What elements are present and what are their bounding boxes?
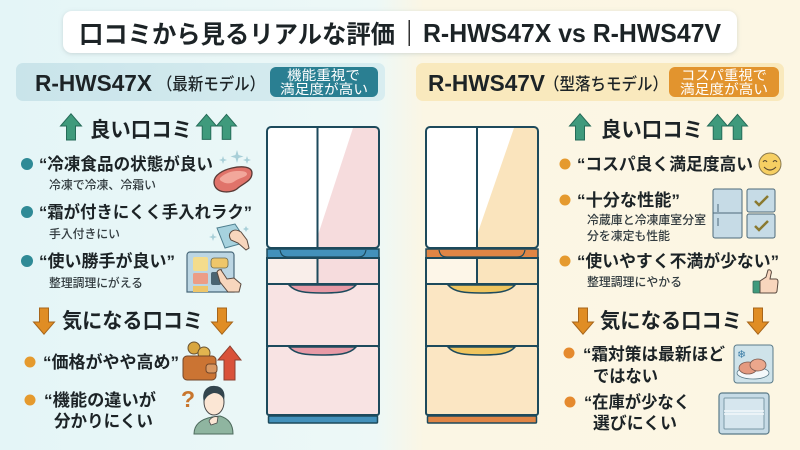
blue base (268, 416, 378, 423)
heading: R-HWS47X (16, 63, 385, 101)
heading: good reviews (570, 114, 748, 142)
top doors (426, 127, 538, 248)
heading: good reviews: 良い口コミ (601, 119, 703, 142)
review: usability: “使い勝手が良い” (39, 251, 175, 271)
blue divider band (267, 249, 379, 258)
icon: thumbs up (753, 270, 778, 293)
icon: confused person (181, 386, 233, 434)
icon: frozen food plate: ❄ (737, 349, 746, 361)
heading: concerns: 気になる口コミ (62, 310, 203, 333)
review: price: “価格がやや高め” (43, 352, 179, 372)
review: performance: 分を凍定も性能 (587, 228, 670, 243)
icon: wallet, coins and up arrow (183, 342, 241, 380)
heading: concerns: 気になる口コミ (600, 310, 742, 333)
review: frost control: “霜対策は最新ほど (583, 344, 725, 364)
title: 口コミから見るリアルな評価 (79, 21, 395, 49)
fridge: R-HWS47V (426, 127, 538, 423)
heading: R-HWS47X: （最新モデル） (157, 74, 265, 94)
review: performance: 冷蔵庫と冷凍庫室分室 (587, 212, 706, 227)
icon: hand with cloth (209, 224, 249, 250)
title (63, 11, 737, 53)
review: usability: 整理調理にがえる (49, 275, 143, 290)
orange divider band (426, 249, 538, 258)
lower drawer (426, 346, 538, 415)
icon: confused person: ? (181, 386, 195, 412)
icon: meat with sparkles (214, 150, 252, 192)
heading: R-HWS47V (416, 63, 784, 101)
review: usability (21, 251, 175, 290)
middle compartments (426, 258, 538, 284)
review: low stock: 選びにくい (593, 414, 677, 433)
review: performance (560, 190, 706, 243)
heading: R-HWS47V: コスパ重視で (681, 68, 767, 83)
review: value: “コスパ良く満足度高い (577, 154, 753, 174)
upper drawer (426, 284, 538, 346)
heading: good reviews: 良い口コミ (90, 119, 192, 142)
review: easy to use: 整理調理にやかる (587, 274, 682, 289)
panel: R-HWS47X (16, 63, 385, 434)
review: easy to use (560, 251, 779, 289)
review: frost: “霜が付きにくく手入れラク” (39, 202, 252, 222)
orange base (428, 416, 536, 423)
lower drawer (267, 346, 379, 415)
heading: concerns (572, 308, 768, 334)
heading: concerns (34, 308, 232, 334)
review: frozen food: “冷凍食品の状態が良い (39, 154, 213, 174)
title: R-HWS47X vs R-HWS47V (423, 18, 722, 48)
icon: frozen food plate (734, 345, 773, 383)
heading: R-HWS47X: 機能重視で (287, 68, 360, 83)
review: feature difference: 分かりにくい (54, 412, 153, 431)
review: feature difference (24, 390, 156, 431)
review: low stock (564, 392, 690, 433)
fridge: R-HWS47X (267, 127, 379, 423)
review: frost control (564, 344, 725, 386)
icon: smiling face (759, 153, 781, 175)
review: frozen food (21, 154, 213, 192)
panel: R-HWS47V (416, 63, 784, 434)
review: low stock: “在庫が少なく (584, 392, 690, 412)
top doors (267, 127, 379, 248)
icon: fridge with check marks (713, 189, 775, 238)
heading: R-HWS47V: （型落ちモデル） (544, 74, 668, 94)
heading: R-HWS47V: R-HWS47V (428, 70, 546, 96)
review: frost: 手入付きにい (49, 226, 120, 241)
review: easy to use: “使いやすく不満が少ない” (577, 251, 779, 271)
review: performance: “十分な性能” (577, 190, 680, 210)
review: frozen food: 冷凍で冷凍、冷霜い (49, 177, 156, 192)
middle compartments (267, 258, 379, 284)
review: frost control: ではない (593, 367, 658, 386)
heading: R-HWS47V: 満足度が高い (680, 81, 768, 97)
review: frost (21, 202, 252, 241)
icon: storage tray with hand (187, 252, 241, 292)
heading: good reviews (60, 114, 237, 142)
heading: R-HWS47X: 満足度が高い (280, 81, 368, 97)
heading: R-HWS47X: R-HWS47X (35, 70, 153, 96)
upper drawer (267, 284, 379, 346)
review: feature difference: “機能の違いが (44, 390, 156, 410)
icon: empty freezer (719, 393, 769, 434)
